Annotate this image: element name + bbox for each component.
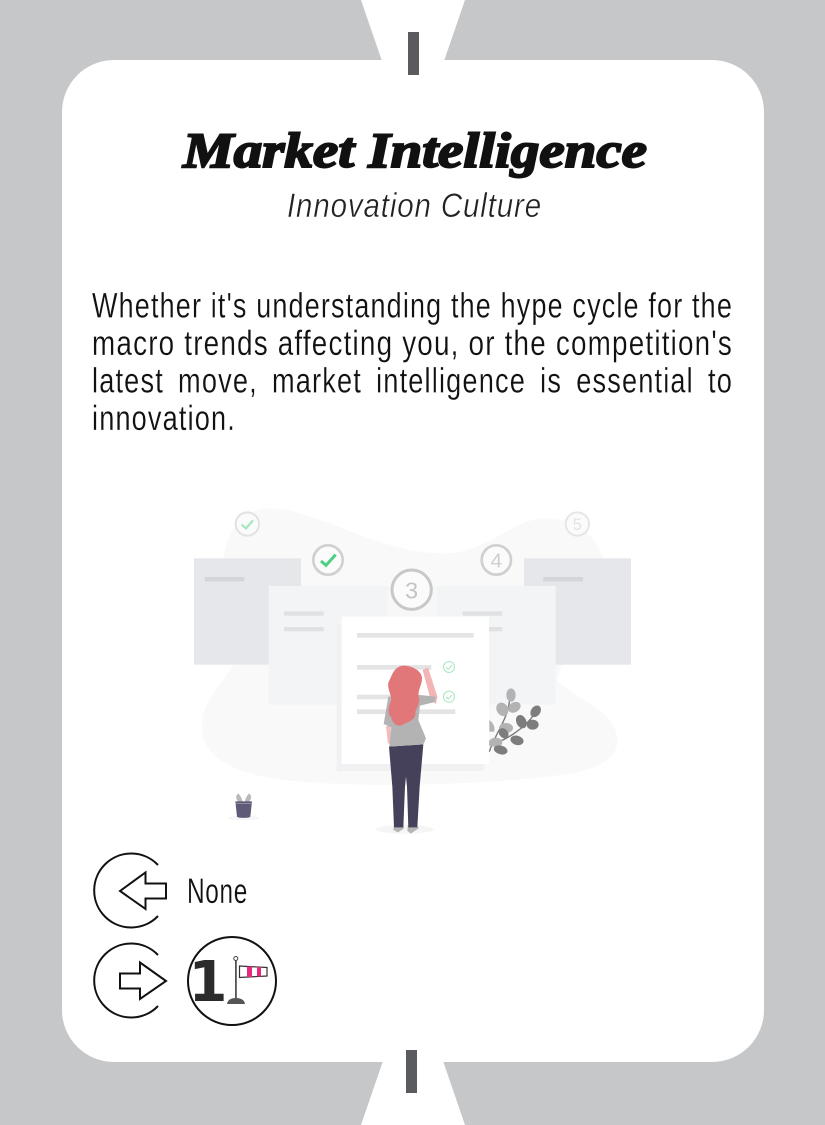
step badge: 5 xyxy=(566,512,589,536)
top slot mark xyxy=(408,32,419,75)
illustration: person reviewing checklist documents xyxy=(194,508,631,834)
badge: output count and windsock: 1 xyxy=(189,950,227,1015)
small pot xyxy=(228,793,259,820)
back documents xyxy=(194,558,631,665)
body text: innovation. xyxy=(92,399,236,438)
subtitle: Innovation Culture xyxy=(287,187,542,225)
step badge: faded check xyxy=(236,512,259,536)
step badge: 4 xyxy=(482,545,511,575)
badge: output count and windsock xyxy=(188,937,276,1025)
input label: None xyxy=(187,872,248,911)
step badge: 3: 3 xyxy=(405,577,418,603)
person xyxy=(376,666,437,834)
icon: output arrow xyxy=(94,944,166,1018)
step badge: 5: 5 xyxy=(573,515,582,534)
plant xyxy=(489,688,543,756)
step badge: 4: 4 xyxy=(491,550,502,573)
title: Market Intelligence xyxy=(182,122,647,178)
front document xyxy=(337,617,489,771)
background blob xyxy=(202,508,617,785)
step badge: 3 xyxy=(392,570,431,609)
step badge: check xyxy=(313,545,343,575)
icon: input arrow xyxy=(94,854,166,928)
body text xyxy=(92,286,733,438)
bottom slot mark xyxy=(406,1050,417,1093)
middle documents xyxy=(269,586,556,705)
